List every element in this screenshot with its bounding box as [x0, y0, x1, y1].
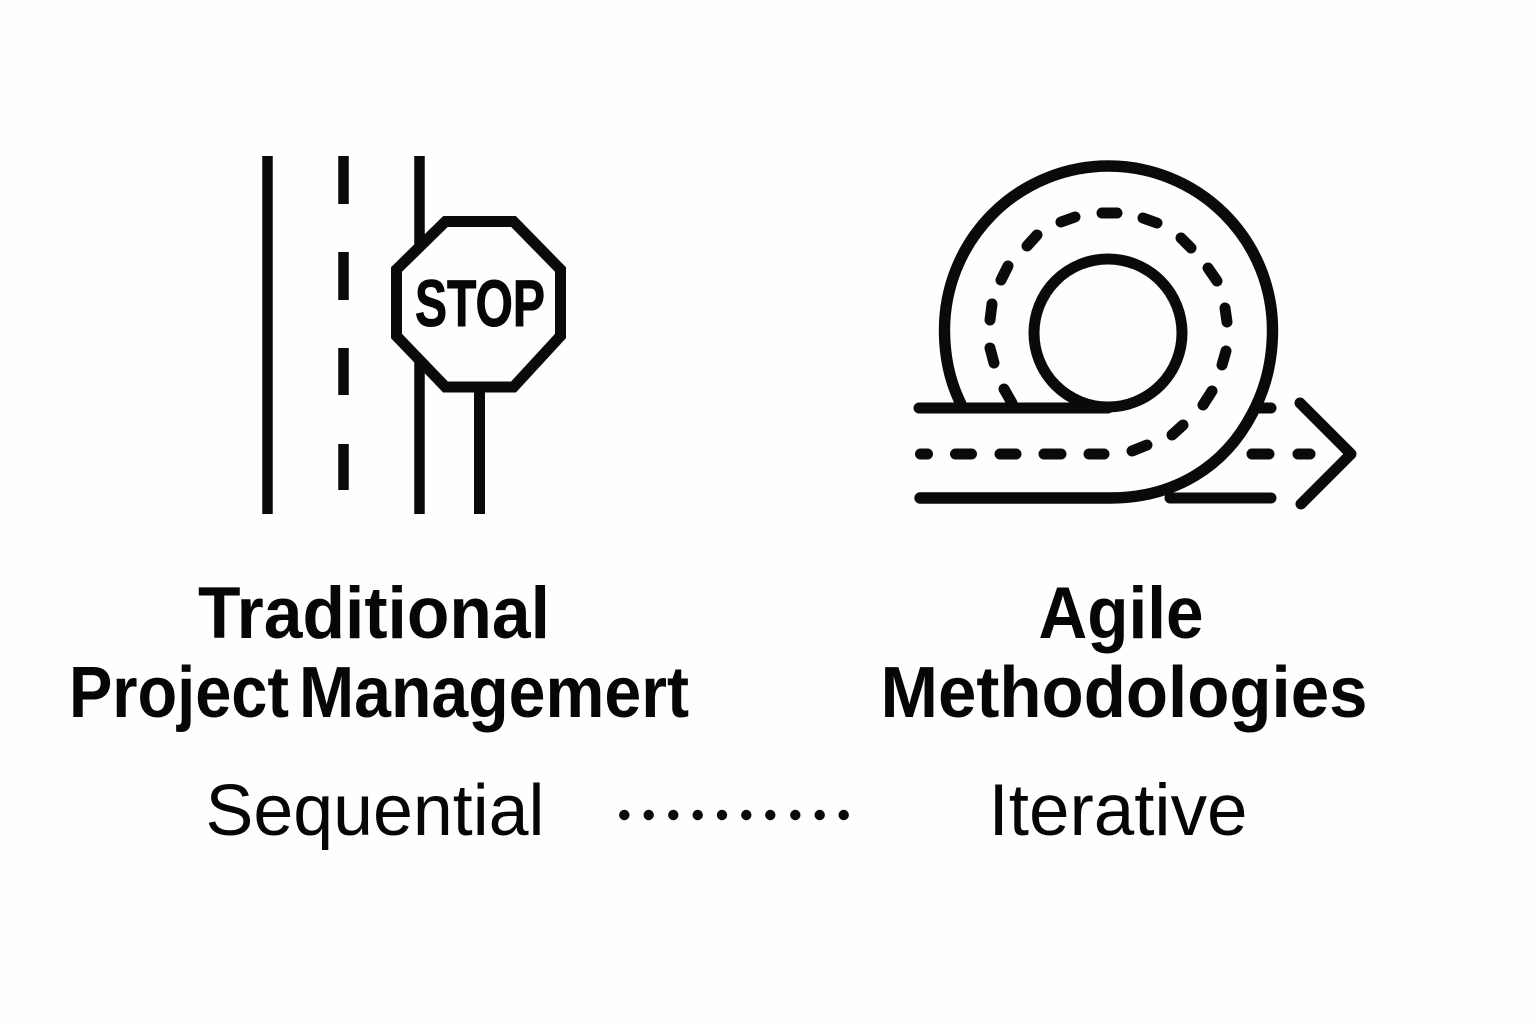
road stubs beyond loop: [1170, 408, 1271, 498]
heading: agile line 2: Methodologies: [880, 653, 1368, 733]
arrow head: [1300, 403, 1351, 504]
outer loop: [920, 166, 1272, 498]
label: iterative: Iterative: [988, 770, 1248, 851]
heading: agile line 1: Agile: [1038, 573, 1204, 654]
stop sign post: [474, 388, 485, 514]
heading: traditional line 2: [69, 653, 689, 733]
dashed loop centre: [990, 213, 1227, 451]
road left edge: [262, 156, 273, 514]
heading: traditional line 2: Managemert: [299, 653, 689, 733]
top road edge: [919, 402, 1108, 414]
heading: traditional line 2: Project: [69, 653, 289, 733]
dotted connector: [619, 810, 849, 820]
dashes before arrow: [1252, 448, 1310, 460]
label: sequential: Sequential: [206, 771, 544, 851]
road centre dashed line: [338, 156, 349, 490]
heading: traditional line 1: Traditional: [198, 573, 550, 654]
stop sign text: STOP: [415, 266, 545, 340]
icon: agile loop road with arrow: [919, 166, 1351, 504]
dashed road centre: [920, 448, 1104, 460]
icon: road with stop sign: [268, 156, 560, 514]
inner circle: [1034, 259, 1182, 407]
stop sign octagon: [396, 222, 560, 387]
road right edge: [414, 156, 425, 514]
